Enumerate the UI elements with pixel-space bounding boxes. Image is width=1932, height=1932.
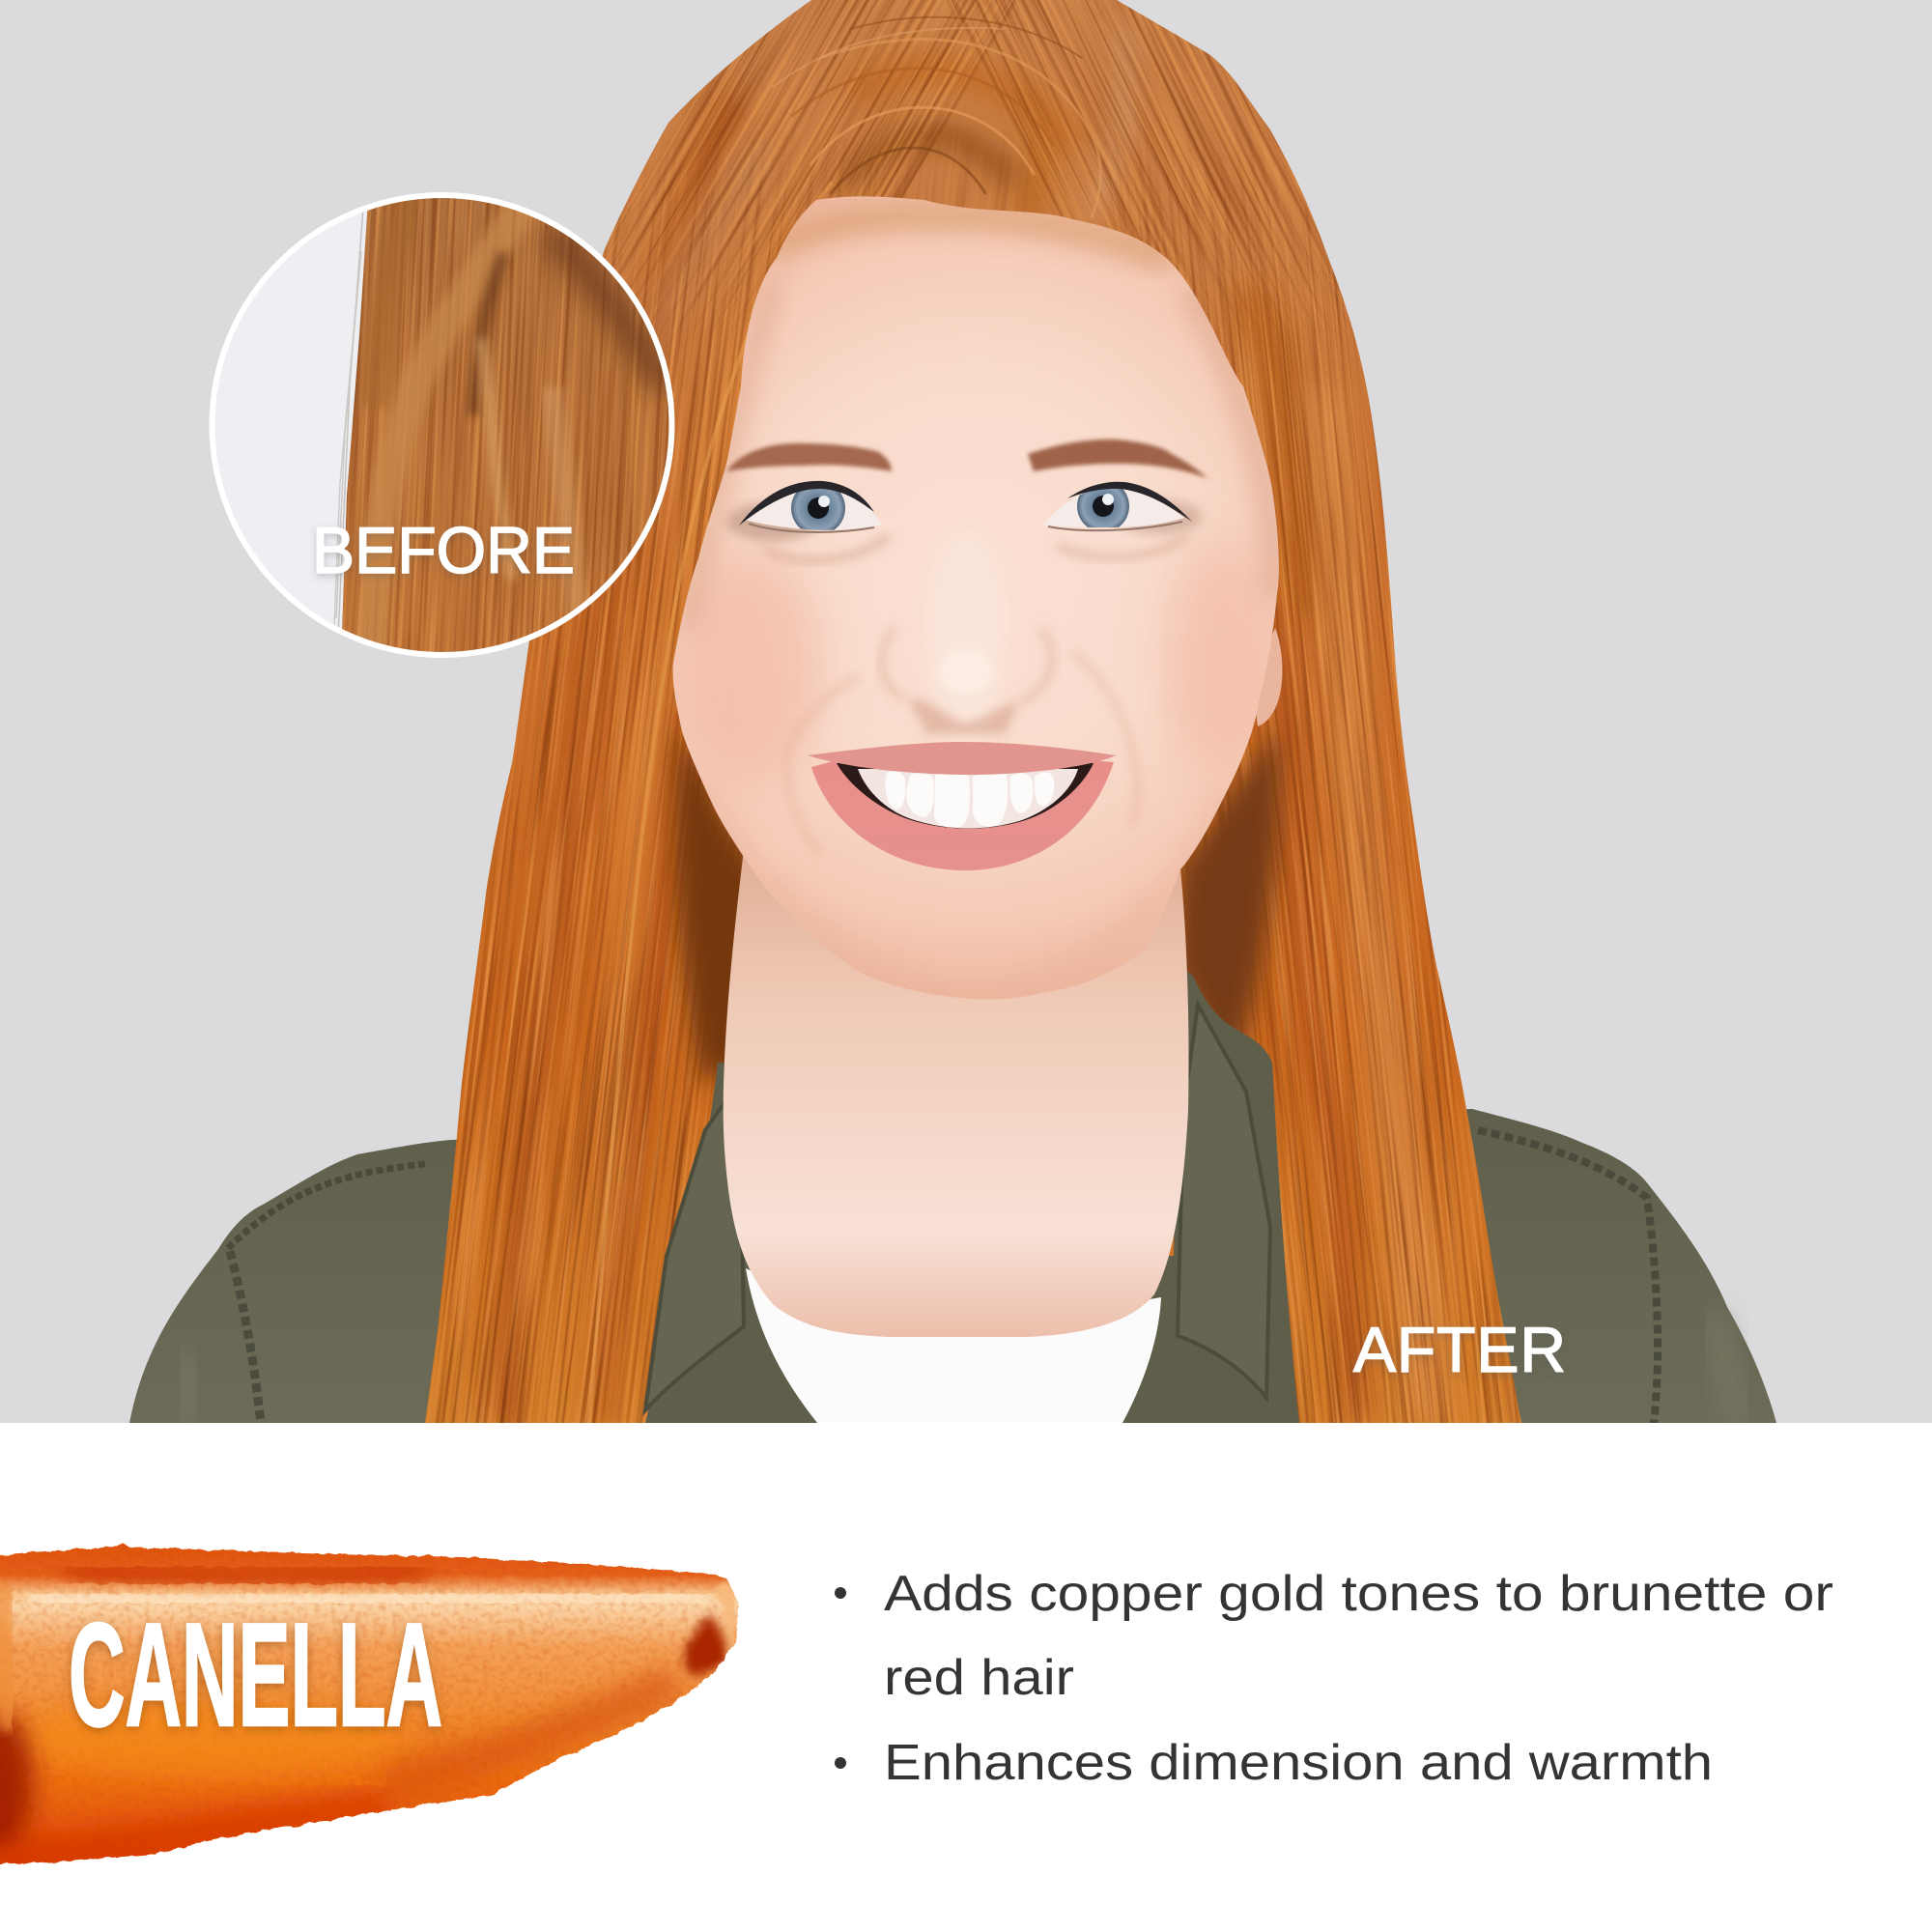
right cheek blush: [1164, 541, 1280, 773]
lower lip: [811, 760, 1114, 870]
nose: [882, 531, 1052, 744]
left eye: [726, 481, 889, 560]
right lower shade: [386, 1681, 676, 1787]
right ear: [1256, 628, 1282, 726]
shirt shoulders: [129, 1109, 1776, 1423]
right eyebrow: [1028, 440, 1208, 478]
left temple shade: [686, 280, 773, 628]
inner shirt panel and collars: [645, 966, 1299, 1423]
broad hair shading: [502, 29, 1430, 1423]
strand texture on crown: [610, 0, 1339, 323]
centre highlight: [551, 386, 580, 638]
upper right dark tone: [551, 232, 667, 386]
upper left hair tone: [372, 198, 406, 406]
mouth interior: [837, 763, 1094, 829]
strand texture on lengths: [427, 147, 1521, 1423]
dark top band: [68, 1571, 425, 1579]
BEFORE label: BEFORE: [312, 514, 575, 587]
dark pigment spot: [684, 1613, 727, 1676]
hair silhouette with strands: [425, 0, 1521, 1423]
mouth: [808, 742, 1116, 870]
dark streak: [473, 253, 504, 415]
white t-shirt: [746, 1268, 1161, 1423]
dark hair beside right jaw: [1174, 729, 1278, 1072]
flyaway strands: [334, 208, 363, 638]
warm mid glow: [19, 1702, 406, 1776]
smile lines: [786, 652, 1138, 855]
right temple shade: [1188, 290, 1275, 599]
left eyebrow: [726, 443, 892, 471]
bullet one: Adds copper gold tones to brunette or: [884, 1566, 1833, 1622]
bottom shade: [0, 1806, 386, 1860]
CANELLA label: CANELLA: [69, 1593, 442, 1757]
mottled pigment: [0, 1536, 753, 1874]
AFTER label: AFTER: [1353, 1314, 1566, 1385]
teeth: [858, 769, 1078, 829]
bullet two: Enhances dimension and warmth: [884, 1735, 1713, 1791]
right eye: [1042, 480, 1202, 557]
upper lip: [808, 742, 1116, 775]
highlight band: [29, 1596, 710, 1602]
crown strands: [589, 17, 1100, 1423]
orange watercolour swatch: [0, 1536, 753, 1874]
dark hair beside left jaw: [661, 728, 744, 1095]
light vertical streak: [481, 338, 512, 580]
right dark edge: [659, 348, 674, 454]
pale right rim: [720, 1584, 731, 1666]
grey studio background: [0, 0, 1932, 1423]
portrait photo area: [0, 0, 1932, 1526]
before hair mass: [302, 107, 738, 708]
left cheek blush: [676, 551, 821, 782]
before hair detail circle: [211, 107, 738, 708]
jaw shade: [696, 782, 1227, 997]
light hair band: [372, 198, 526, 657]
left edge shade: [0, 1710, 33, 1855]
neck: [724, 850, 1189, 1337]
bullet one: red hair: [884, 1650, 1074, 1706]
benefits bullet list: [835, 1566, 1833, 1791]
hairline blush: [773, 215, 1169, 261]
strand texture: [302, 107, 738, 708]
bullet one: [835, 1566, 1833, 1706]
left orange edge: [0, 1584, 10, 1729]
face: [673, 196, 1280, 1000]
